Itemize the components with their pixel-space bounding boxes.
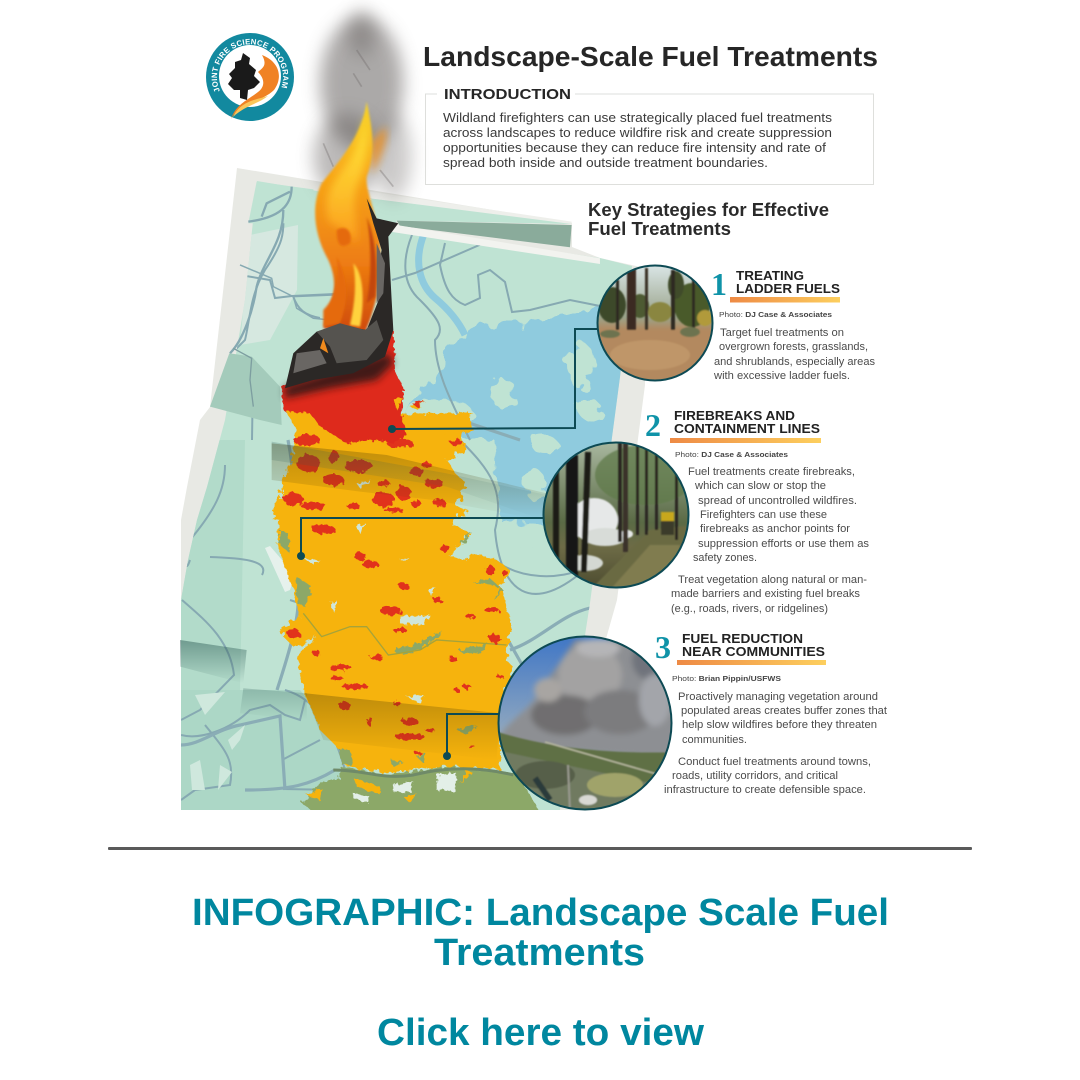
text: strategy 3: Conduct fuel treatments around towns, <box>678 756 871 768</box>
photo credit 3: Photo: Brian Pippin/USFWS <box>672 674 781 683</box>
text: strategy 2: made barriers and existing fuel breaks <box>671 588 860 600</box>
river through burn area <box>303 613 507 655</box>
text: strategy 1 <box>713 327 875 382</box>
text: strategy 3: roads, utility corridors, and critical <box>672 770 838 782</box>
title: Landscape-Scale Fuel Treatments <box>423 41 878 72</box>
text: strategy 1: with excessive ladder fuels. <box>713 370 850 382</box>
text: strategy 1: Target fuel treatments on <box>720 327 844 339</box>
map base land <box>181 170 651 810</box>
heading: key strategies: Fuel Treatments <box>588 219 731 239</box>
call to action: Click here to view <box>377 1012 704 1054</box>
introduction text: spread both inside and outside treatment boundaries. <box>443 155 768 170</box>
caption: infographic title <box>192 892 889 974</box>
charred burning edge <box>285 198 398 398</box>
heading: treating ladder fuels <box>730 268 840 302</box>
caption: infographic title: INFOGRAPHIC: Landscape Scale Fuel <box>192 892 889 934</box>
text: strategy 2: which can slow or stop the <box>694 480 826 492</box>
photo credit 2: Photo: DJ Case & Associates <box>675 450 788 459</box>
text: strategy 3: Proactively managing vegetation around <box>678 691 878 703</box>
flame <box>315 102 386 332</box>
photo 3: wildfire smoke above community <box>498 636 680 812</box>
folded-paper shading <box>272 444 546 511</box>
number 1: 1 <box>711 266 727 302</box>
number 2: 2 <box>645 407 661 443</box>
heading: key strategies: Key Strategies for Effective <box>588 200 829 220</box>
text: strategy 3: help slow wildfires before they threaten <box>682 719 877 731</box>
text: strategy 3: populated areas creates buffer zones that <box>681 705 888 717</box>
yellow flecks near red front <box>287 398 473 433</box>
panel: fold-out map <box>180 10 651 812</box>
introduction heading: INTRODUCTION <box>444 86 571 103</box>
text: strategy 2: firebreaks as anchor points for <box>700 523 850 535</box>
red front below the charred edge <box>282 330 473 443</box>
green unburned edges and southern zone <box>280 530 540 812</box>
orange patches in southern zone <box>307 770 473 803</box>
text: strategy 2: Treat vegetation along natural or man- <box>678 574 867 586</box>
photo credit 1: Photo: DJ Case & Associates <box>719 310 832 319</box>
red burn patches <box>283 434 508 755</box>
fire spread map: orange burn area <box>180 413 547 812</box>
divider <box>108 847 972 850</box>
fold shadow band at left edge <box>210 353 282 425</box>
introduction text <box>443 110 833 170</box>
heading: firebreaks and containment lines: CONTAINMENT LINES <box>674 421 820 436</box>
text: strategy 2 <box>671 466 869 615</box>
roads <box>181 186 600 800</box>
text: strategy 3: communities. <box>682 734 747 746</box>
heading: firebreaks and containment lines: FIREBREAKS AND <box>674 408 795 423</box>
water body <box>405 306 621 527</box>
text: strategy 1: overgrown forests, grasslands, <box>719 341 868 353</box>
heading: key strategies <box>588 200 829 239</box>
left folded panel <box>248 182 320 223</box>
caption: infographic title: Treatments <box>434 932 645 974</box>
text: strategy 2: Firefighters can use these <box>700 509 827 521</box>
text: strategy 1: and shrublands, especially areas <box>714 356 875 368</box>
built-up pale patches <box>190 692 245 790</box>
heading: fuel reduction near communities: FUEL REDUCTION <box>682 631 803 646</box>
photo 1: treated pine forest <box>596 264 714 384</box>
pale patches in burn area <box>303 480 435 703</box>
heading: treating ladder fuels: LADDER FUELS <box>736 281 840 296</box>
photo 2: firebreak in pine forest <box>543 442 695 590</box>
land patches in water <box>406 340 610 529</box>
introduction text: Wildland firefighters can use strategically placed fuel treatments <box>443 110 833 125</box>
text: strategy 2: Fuel treatments create firebreaks, <box>688 466 855 478</box>
text: strategy 3 <box>664 691 888 796</box>
logo: Joint Fire Science Program <box>206 33 294 121</box>
pale patches in southern zone <box>353 773 457 803</box>
heading: firebreaks and containment lines <box>670 408 821 443</box>
smoke wisps <box>323 50 393 187</box>
heading: fuel reduction near communities <box>677 631 826 665</box>
connector 2 <box>297 518 548 560</box>
text: strategy 2: safety zones. <box>693 552 757 564</box>
introduction text: across landscapes to reduce wildfire risk and create suppression <box>443 125 832 140</box>
text: strategy 3: infrastructure to create defensible space. <box>664 784 866 796</box>
text: strategy 2: (e.g., roads, rivers, or ridgelines) <box>671 603 828 615</box>
number 3: 3 <box>655 629 671 665</box>
smoke plume <box>285 10 412 398</box>
map paper border <box>181 168 645 810</box>
introduction text: opportunities because they can reduce fire intensity and rate of <box>443 140 826 155</box>
text: strategy 2: suppression efforts or use them as <box>698 538 869 550</box>
text: strategy 2: spread of uncontrolled wildfires. <box>698 495 857 507</box>
river <box>419 234 465 335</box>
back-sheet top strip <box>210 182 600 425</box>
heading: treating ladder fuels: TREATING <box>736 268 804 283</box>
road at south <box>333 769 513 776</box>
logo: Joint Fire Science Program: JOINT FIRE SCIENCE PROGRAM <box>212 38 288 92</box>
connector 3 <box>443 714 502 760</box>
panel: introduction <box>426 86 874 184</box>
connector 1 <box>388 329 600 433</box>
heading: fuel reduction near communities: NEAR COMMUNITIES <box>682 644 825 659</box>
